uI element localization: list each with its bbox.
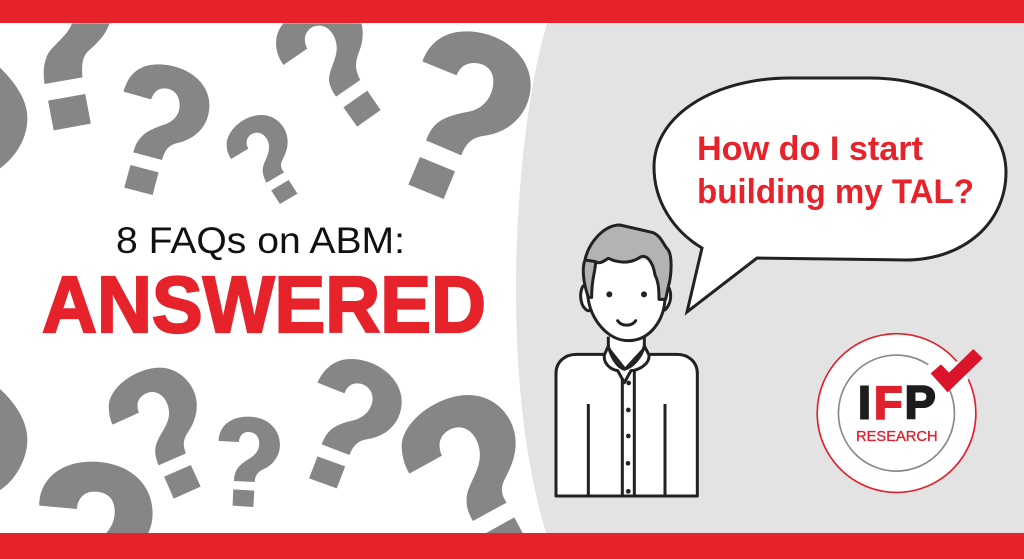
question mark: upper second — [123, 64, 209, 195]
logo IFP letters: F — [874, 377, 902, 429]
heading: 8 FAQs on ABM: 8 FAQs on ABM: — [116, 219, 405, 261]
head and collar — [581, 225, 671, 383]
logo outer red ring — [817, 334, 976, 492]
bubble outline — [654, 78, 1006, 312]
question mark: bottom left, cut by band — [39, 462, 153, 533]
shirt body — [556, 354, 697, 496]
hair — [583, 225, 671, 299]
smile — [618, 321, 636, 325]
heading: ANSWERED: ANSWERED — [42, 260, 486, 349]
buttons — [626, 381, 631, 494]
face — [588, 260, 664, 341]
logo IFP letters: I — [858, 377, 871, 429]
person illustration — [556, 225, 697, 496]
ears — [581, 286, 671, 311]
question mark: lower right of centre — [309, 359, 402, 488]
logo: IFP Research — [817, 333, 983, 492]
question mark: top centre — [276, 23, 381, 127]
grey background panel — [516, 23, 1024, 533]
question mark: lower left edge — [0, 389, 27, 490]
question mark: lower tilted — [109, 368, 201, 499]
bottom red band — [0, 533, 1024, 559]
logo inner grey ring — [838, 355, 954, 471]
top red band — [0, 0, 1024, 23]
bubble text line 2: building my TAL? — [697, 173, 974, 211]
sleeve lines — [588, 404, 665, 496]
collar — [604, 346, 649, 383]
logo check mark — [931, 349, 983, 392]
eyes — [606, 291, 647, 297]
face outline — [588, 295, 665, 341]
neck — [608, 337, 644, 369]
question mark: lower large — [402, 395, 523, 533]
logo white disc — [817, 333, 975, 492]
question mark: lower centre — [219, 417, 280, 507]
bubble text line 1: How do I start — [697, 130, 923, 168]
question mark: left edge — [0, 68, 27, 168]
shirt placket — [622, 369, 634, 496]
logo IFP letters: P — [905, 377, 936, 429]
logo RESEARCH text: RESEARCH — [856, 428, 938, 445]
question mark: upper small — [227, 115, 297, 204]
speech bubble — [654, 78, 1006, 312]
question mark: top left — [44, 23, 109, 130]
question mark: upper large — [408, 31, 531, 199]
question marks: lower row — [0, 359, 523, 533]
question marks: upper row — [0, 23, 381, 204]
